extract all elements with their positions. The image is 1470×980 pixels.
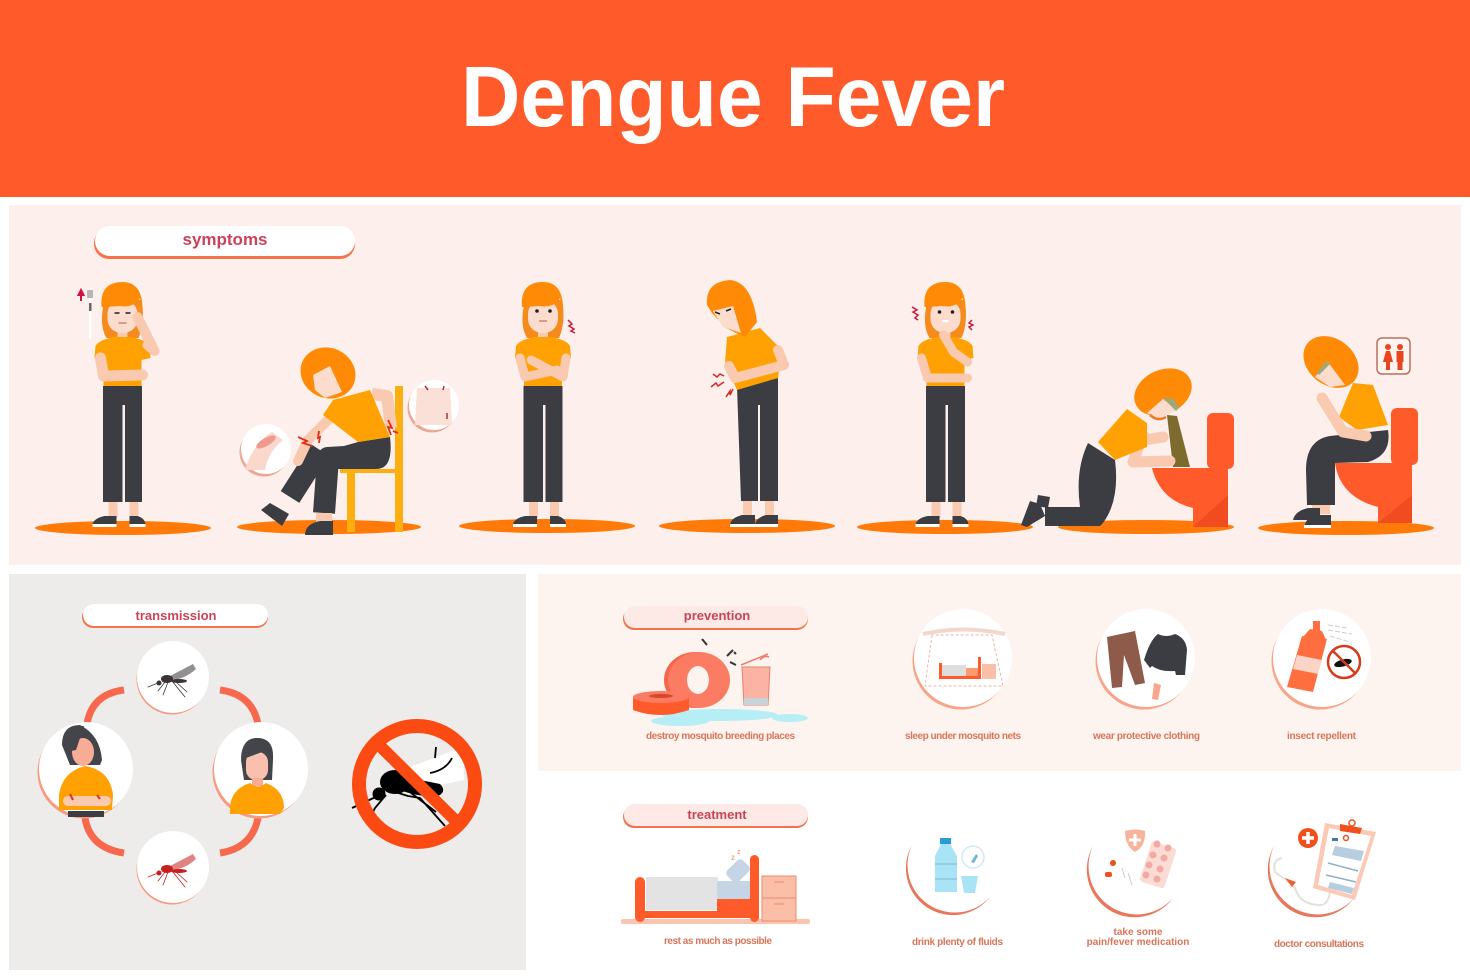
icon: drink fluids <box>906 838 990 915</box>
circle: infected person <box>38 722 133 818</box>
heading: symptoms: symptoms <box>182 230 268 249</box>
head <box>1293 325 1369 399</box>
title banner <box>0 0 1470 197</box>
icon: medication <box>1087 830 1177 917</box>
arm <box>1322 398 1366 436</box>
shoes <box>305 521 333 535</box>
heading: treatment: treatment <box>687 807 747 822</box>
figure: arms crossed, body ache <box>513 282 575 527</box>
label: medication: take some <box>1114 927 1163 938</box>
icon: tires and bin <box>633 639 808 726</box>
pants <box>290 450 378 513</box>
icon: no mosquito sign <box>352 726 475 842</box>
panel: treatment <box>621 804 1376 950</box>
head <box>292 339 364 407</box>
pants <box>1045 443 1116 526</box>
heading: transmission <box>82 604 268 628</box>
circle: healthy person <box>212 722 308 818</box>
figure: fever and headache <box>78 282 154 527</box>
pain marks <box>912 307 973 330</box>
label: medication: pain/fever medication <box>1087 937 1189 948</box>
arm <box>1133 435 1170 462</box>
heading: transmission: transmission <box>136 608 217 623</box>
head <box>1127 359 1199 425</box>
title: Dengue Fever <box>461 50 1005 145</box>
chair <box>340 386 403 532</box>
label: nets: sleep under mosquito nets <box>905 731 1021 742</box>
toilet <box>1152 413 1234 527</box>
heading: prevention: prevention <box>684 608 750 623</box>
icon: bed: z <box>737 849 741 856</box>
icon: thermometer <box>78 290 93 339</box>
panel: transmission <box>9 574 526 970</box>
shirt <box>1098 409 1147 460</box>
figure: sore throat, hand at chin <box>912 282 974 527</box>
figure: stomach pain, bending <box>707 280 784 527</box>
heading: symptoms <box>94 226 355 259</box>
shirt <box>1339 383 1388 430</box>
pain marks <box>711 374 733 397</box>
label: fluids: drink plenty of fluids <box>912 937 1003 948</box>
inset: back pain <box>408 380 459 432</box>
heading: treatment <box>623 804 808 828</box>
figure: vomiting over toilet <box>1021 359 1234 527</box>
circle: infected mosquito <box>136 831 209 904</box>
pain marks <box>298 420 398 446</box>
figure: joint and muscle pain, sitting on chair <box>240 339 459 535</box>
figure: diarrhea, sitting on toilet <box>1293 325 1418 528</box>
pain mark <box>568 320 575 333</box>
icon: mosquito net <box>912 609 1012 710</box>
icon: doctor consultation <box>1268 820 1376 917</box>
label: doctor: doctor consultations <box>1274 939 1364 950</box>
mouth <box>1150 415 1166 419</box>
panel: prevention <box>538 574 1461 771</box>
vomit <box>1167 415 1190 467</box>
arms <box>372 394 391 428</box>
panel: symptoms <box>9 205 1461 565</box>
icon: insect repellent <box>1272 609 1371 710</box>
icon: bed: z <box>731 853 735 862</box>
shoes <box>1021 501 1045 527</box>
icon: protective clothing <box>1096 609 1195 710</box>
toilet <box>1335 408 1418 523</box>
ground shadows <box>35 519 1434 535</box>
legs <box>1312 500 1330 514</box>
icon: bed <box>621 849 810 924</box>
label: repellent: insect repellent <box>1287 731 1357 742</box>
label: clothing: wear protective clothing <box>1092 731 1200 742</box>
label: rest: rest as much as possible <box>664 936 772 947</box>
inset: skin rash <box>240 424 291 476</box>
shirt <box>323 390 390 442</box>
icon: restroom sign <box>1377 338 1410 374</box>
head <box>707 280 757 337</box>
cycle arcs <box>85 690 258 853</box>
circle: healthy mosquito <box>136 641 209 714</box>
heading: prevention <box>623 606 808 630</box>
shoes <box>1293 508 1320 520</box>
label: breeding places: destroy mosquito breeding places <box>646 731 795 742</box>
